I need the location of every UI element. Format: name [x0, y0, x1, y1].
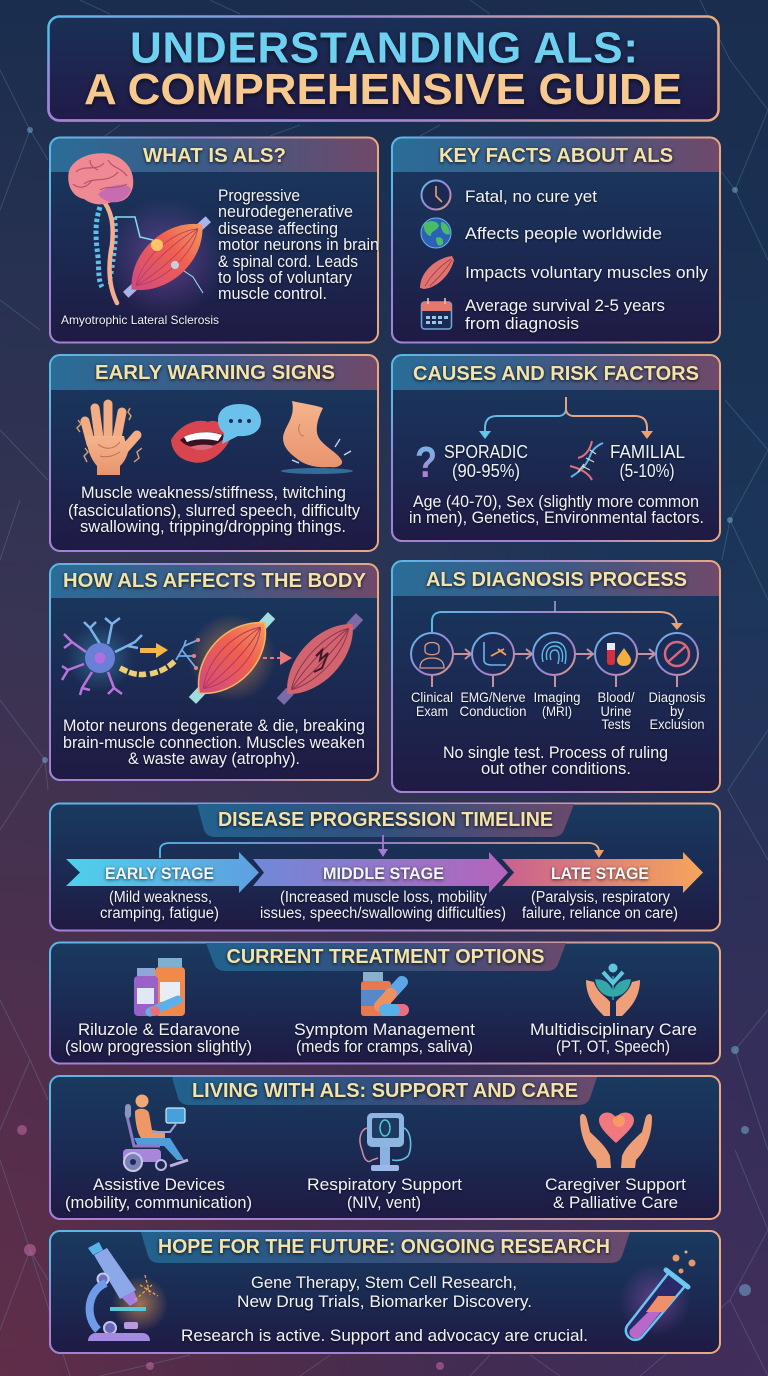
icon: medicine bottles: [134, 958, 185, 1016]
icon: hand: [77, 404, 142, 475]
icon: foot: [281, 401, 353, 474]
panel: how ALS affects the body: [50, 564, 378, 780]
step: diagnosis by exclusion: [648, 633, 706, 732]
stage descriptions: cramping, fatigue): [100, 905, 219, 922]
stage descriptions: [100, 889, 678, 922]
icon: DNA: [570, 441, 603, 480]
icon: microscope: [88, 1242, 168, 1341]
stage labels: [105, 864, 649, 883]
step: blood and urine tests: Blood/: [598, 689, 635, 705]
description: to loss of voluntary: [218, 269, 353, 287]
icon: ventilator: [360, 1113, 411, 1171]
panel: what is ALS: [50, 137, 379, 342]
heading tab: [172, 1077, 597, 1105]
risk factors text: Age (40-70), Sex (slightly more common: [413, 493, 699, 511]
arrow: branching bracket: [479, 397, 653, 439]
heading tab: [141, 1232, 630, 1263]
panel: key facts: [392, 137, 720, 342]
description: muscle control.: [218, 285, 327, 303]
heading: WHAT IS ALS?: [143, 144, 286, 167]
step: imaging: Imaging: [534, 689, 580, 705]
step: diagnosis by exclusion: by: [670, 703, 684, 719]
step: blood and urine tests: [595, 633, 637, 732]
arrow: late stage: [502, 852, 703, 893]
treatment labels: (slow progression slightly): [65, 1038, 252, 1056]
step: blood and urine tests: Urine: [600, 703, 632, 719]
stage descriptions: (Increased muscle loss, mobility: [280, 889, 487, 906]
research text: New Drug Trials, Biomarker Discovery.: [237, 1293, 532, 1311]
icon: hands and heart: [580, 1112, 652, 1168]
step: EMG: Conduction: [460, 703, 526, 719]
description: [218, 187, 379, 303]
description: swallowing, tripping/dropping things.: [80, 518, 346, 536]
panel: disease progression timeline: [50, 804, 720, 930]
icon: caring hands with plant: [586, 964, 640, 1016]
support labels: (NIV, vent): [347, 1194, 421, 1212]
icon: mouth and speech bubble: [171, 404, 261, 463]
arrow: early stage: [66, 852, 259, 893]
heading: DISEASE PROGRESSION TIMELINE: [218, 808, 553, 831]
step: diagnosis by exclusion: Exclusion: [650, 716, 704, 732]
heading: HOPE FOR THE FUTURE: ONGOING RESEARCH: [158, 1235, 610, 1258]
description: motor neurons in brain: [218, 236, 379, 254]
treatment labels: [65, 1021, 697, 1056]
support labels: & Palliative Care: [553, 1194, 678, 1212]
icon: wheelchair user: [123, 1094, 188, 1171]
text: voluntary muscles: Impacts voluntary muscles only: [465, 264, 709, 282]
research text: Gene Therapy, Stem Cell Research,: [251, 1274, 517, 1292]
treatment labels: (PT, OT, Speech): [556, 1038, 670, 1056]
heading: HOW ALS AFFECTS THE BODY: [63, 569, 366, 592]
description: brain-muscle connection. Muscles weaken: [63, 734, 365, 752]
title banner: [48, 16, 718, 120]
stage labels: EARLY STAGE: [105, 864, 214, 883]
stage descriptions: issues, speech/swallowing difficulties): [260, 905, 506, 922]
icon: pills: [361, 972, 403, 1016]
text: survival: from diagnosis: [465, 315, 579, 333]
support labels: [65, 1176, 686, 1212]
panel: hope for the future: [50, 1231, 720, 1353]
panel: living with ALS: [50, 1076, 720, 1219]
treatment labels: Riluzole & Edaravone: [78, 1021, 240, 1039]
step: EMG: EMG/Nerve: [460, 689, 526, 705]
panel: causes and risk factors: [392, 355, 720, 541]
text: survival: Average survival 2-5 years: [465, 297, 665, 315]
step: EMG: [460, 633, 526, 719]
heading: KEY FACTS ABOUT ALS: [439, 144, 673, 167]
icon: muscle: [420, 256, 454, 289]
panel: diagnosis process: [392, 561, 720, 792]
support labels: (mobility, communication): [65, 1194, 252, 1212]
description: disease affecting: [218, 220, 338, 238]
text: worldwide: Affects people worldwide: [465, 225, 662, 243]
arrow: top bracket: [432, 601, 683, 632]
icon: test tube: [619, 1250, 696, 1340]
description: (fasciculations), slurred speech, difficulty: [68, 502, 361, 520]
treatment labels: Multidisciplinary Care: [530, 1021, 697, 1039]
icon: calendar: [422, 298, 452, 329]
step: clinical exam: Clinical: [411, 689, 453, 705]
sporadic label: (90-95%): [452, 461, 520, 481]
title line 2: A COMPREHENSIVE GUIDE: [84, 65, 682, 114]
description: [68, 484, 361, 536]
caption: Amyotrophic Lateral Sclerosis: [61, 313, 219, 327]
description: & waste away (atrophy).: [128, 750, 300, 768]
support labels: Assistive Devices: [93, 1176, 225, 1194]
heading tab: [197, 804, 574, 837]
step: imaging: (MRI): [542, 703, 572, 719]
description: Progressive: [218, 187, 300, 205]
icon: question mark: ?: [415, 438, 437, 487]
text: survival: [465, 297, 665, 333]
description: & spinal cord. Leads: [218, 253, 358, 271]
description: neurodegenerative: [218, 203, 353, 221]
arrow: middle stage: [253, 852, 508, 893]
icon: clock: [422, 180, 450, 210]
closing message: Research is active. Support and advocacy are crucial.: [181, 1327, 588, 1345]
heading: CURRENT TREATMENT OPTIONS: [226, 945, 544, 968]
risk factors text: in men), Genetics, Environmental factors.: [409, 509, 704, 527]
description: [63, 717, 365, 768]
stage labels: LATE STAGE: [551, 864, 649, 883]
step: diagnosis by exclusion: Diagnosis: [648, 689, 706, 705]
research text: [237, 1274, 532, 1311]
icon: healthy muscle: [176, 600, 288, 716]
text: fatal: Fatal, no cure yet: [465, 188, 597, 206]
note: No single test. Process of ruling: [443, 744, 668, 762]
sporadic label: [444, 442, 528, 481]
heading: CAUSES AND RISK FACTORS: [413, 362, 699, 385]
step: clinical exam: Exam: [416, 703, 448, 719]
familial label: [610, 442, 685, 481]
stage descriptions: failure, reliance on care): [522, 905, 678, 922]
panel: current treatment options: [50, 942, 720, 1064]
arrow: dashed: [263, 651, 292, 665]
arrow: bracket: [160, 835, 604, 858]
heading tab: [206, 943, 566, 971]
risk factors text: [409, 493, 704, 527]
panel: early warning signs: [50, 355, 378, 551]
sporadic label: SPORADIC: [444, 442, 528, 462]
description: Muscle weakness/stiffness, twitching: [81, 484, 346, 502]
step: blood and urine tests: Tests: [602, 716, 630, 732]
note: out other conditions.: [481, 760, 631, 778]
stage labels: MIDDLE STAGE: [323, 864, 444, 883]
icon: neuron: [62, 618, 200, 695]
treatment labels: (meds for cramps, saliva): [296, 1038, 473, 1056]
axon: [120, 660, 176, 675]
familial label: (5-10%): [620, 461, 674, 481]
familial label: FAMILIAL: [610, 442, 685, 462]
stage descriptions: (Paralysis, respiratory: [531, 889, 670, 906]
heading: LIVING WITH ALS: SUPPORT AND CARE: [192, 1079, 578, 1102]
heading: EARLY WARNING SIGNS: [95, 361, 335, 384]
icon: brain and spine with muscle: [68, 153, 225, 318]
support labels: Respiratory Support: [307, 1176, 462, 1194]
step: imaging: [533, 633, 580, 719]
flow arrows: [432, 649, 677, 687]
arrow: signal: [140, 643, 168, 658]
description: Motor neurons degenerate & die, breaking: [63, 717, 365, 735]
icon: atrophied muscle: [266, 603, 374, 715]
heading: ALS DIAGNOSIS PROCESS: [426, 568, 687, 591]
treatment labels: Symptom Management: [294, 1021, 475, 1039]
step: clinical exam: [411, 633, 453, 719]
icon: globe: [421, 218, 451, 248]
note: [443, 744, 668, 778]
support labels: Caregiver Support: [545, 1176, 686, 1194]
title line 1: UNDERSTANDING ALS:: [130, 24, 638, 72]
stage descriptions: (Mild weakness,: [109, 889, 212, 906]
